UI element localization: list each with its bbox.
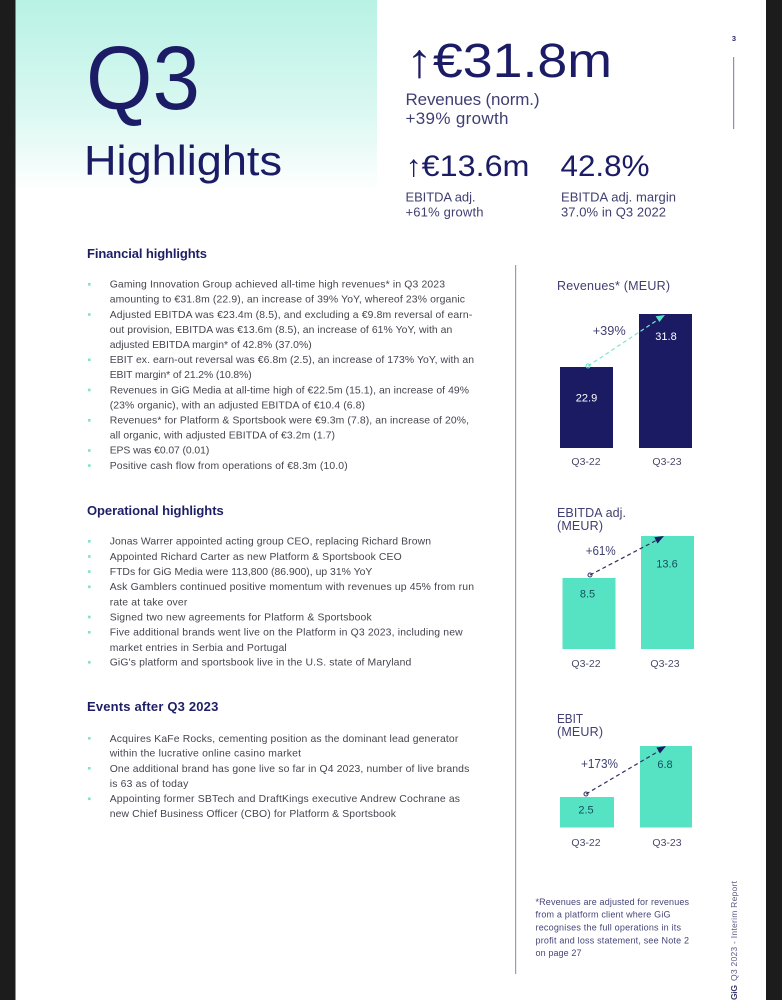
KPI: EBITDA adj. [406,150,530,220]
page number: 3 [732,34,736,43]
heading: events after Q3 2023: Events after Q3 2023 [87,699,218,714]
heading: operational highlights: Operational highlights [87,503,224,518]
chart title: EBIT: EBIT [557,712,583,726]
section: operational highlights [87,503,474,669]
chart: EBIT: Q3-23 [652,837,682,849]
bar: revenues Q3-22 [560,367,613,448]
bullet list: operational: Five additional brands went live on the Platform in Q3 2023, including new [110,628,463,638]
bullet list: events: new Chief Business Officer (CBO) for Platform & Sportsbook [110,809,397,820]
bullet list: financial: adjusted EBITDA margin* of 42.8% (37.0%) [110,340,312,351]
chart title: EBIT: (MEUR) [557,725,603,739]
footnote: *Revenues are adjusted for revenues [536,897,690,907]
bullet list: financial: (23% organic), with an adjusted EBITDA of €10.4 (6.8) [110,400,365,411]
footnote: profit and loss statement, see Note 2 [536,935,689,945]
growth arrow: EBITDA [588,536,664,577]
section: events after Q3 2023 [87,699,469,820]
bar: EBIT Q3-23 [640,746,692,828]
bullet list: financial: Gaming Innovation Group achieved all-time high revenues* in Q3 2023 [110,280,445,291]
KPI: EBITDA adj. margin [560,150,676,220]
bullet list: operational: Ask Gamblers continued positive momentum with revenues up 45% from run [110,582,474,593]
KPI: EBITDA adj.: +61% growth [406,204,484,220]
section: financial highlights [87,246,474,472]
KPI: revenues: ↑€31.8m [406,35,612,88]
chart title: EBITDA adj. [557,506,626,533]
bullet list: financial [88,280,474,472]
chart: revenues: Q3-22 [571,456,601,468]
chart: revenues [557,279,692,468]
chart title: EBIT [557,712,603,739]
KPI: EBITDA adj. margin: 42.8% [560,150,650,183]
bullet list: financial: out provision, EBITDA was €13.6m (8.5), an increase of 61% YoY, with an [110,325,453,336]
title: Q3 Highlights: Highlights [84,137,282,184]
chart: revenues: +39% [593,323,626,338]
chart title: EBITDA adj.: EBITDA adj. [557,506,626,520]
bullet list: financial: EBIT ex. earn-out reversal was €6.8m (2.5), an increase of 173% YoY, with an [110,355,474,366]
footnote: recognises the full operations in its [536,922,682,932]
KPI: EBITDA adj. margin: 37.0% in Q3 2022 [561,204,666,220]
bullet list: events: Acquires KaFe Rocks, cementing position as the dominant lead generator [110,734,459,745]
bullet list: financial: EBIT margin* of 21.2% (10.8%) [110,370,252,381]
chart: EBITDA adj.: 8.5 [580,588,595,600]
bullet list: operational: GiG's platform and sportsbook live in the U.S. state of Maryland [110,658,412,669]
KPI: EBITDA adj. margin: EBITDA adj. margin [561,190,676,204]
bullet list: financial: Revenues* for Platform & Sportsbook were €9.3m (7.8), an increase of 20%, [110,416,469,426]
bullet list: operational [88,537,474,669]
bar: EBITDA Q3-22 [562,578,616,649]
footnote: from a platform client where GiG [536,910,670,920]
bar: revenues Q3-23 [639,314,692,448]
KPI: EBITDA adj.: ↑€13.6m [406,150,530,183]
chart: revenues: 31.8 [655,331,677,343]
chart: revenues: Q3-23 [652,456,682,468]
chart: EBIT: +173% [581,756,618,771]
bullet list: financial: all organic, with adjusted EBITDA of €3.2m (1.7) [110,431,335,442]
bullet list: events: One additional brand has gone live so far in Q4 2023, number of live brands [110,764,469,775]
bar: EBIT Q3-22 [560,797,614,828]
vertical footer label: GiG [729,985,739,1000]
chart: EBIT: Q3-22 [571,837,601,849]
growth arrow: revenues [586,315,665,368]
KPI: revenues: +39% growth [406,109,508,128]
bullet list: financial: Positive cash flow from operations of €8.3m (10.0) [110,461,348,472]
chart: revenues: 22.9 [576,392,597,404]
bullet list: events [88,734,469,820]
bullet list: events: within the lucrative online casino market [109,749,301,760]
vertical footer label: Q3 2023 - Interim Report [729,880,739,981]
bullet list: operational: Jonas Warrer appointed acting group CEO, replacing Richard Brown [110,537,431,548]
bullet list: operational: FTDs for GiG Media were 113,800 (86.900), up 31% YoY [110,567,372,578]
bullet list: operational: Appointed Richard Carter as new Platform & Sportsbook CEO [110,552,402,563]
bullet list: operational: Signed two new agreements for Platform & Sportsbook [110,612,372,623]
heading: financial highlights: Financial highlights [87,246,207,261]
chart: EBITDA adj.: 13.6 [656,558,678,570]
chart: EBITDA adj. [557,506,694,670]
bullet list: financial: amounting to €31.8m (22.9), an increase of 39% YoY, whereof 23% organic [110,295,465,306]
bullet list: events: is 63 as of today [110,779,189,790]
bullet list: operational: rate at take over [110,597,188,608]
bullet list: financial: Adjusted EBITDA was €23.4m (8.5), and excluding a €9.8m reversal of earn- [110,310,472,321]
chart: EBITDA adj.: Q3-23 [650,658,680,670]
chart: EBIT: 6.8 [657,759,673,771]
KPI: revenues: Revenues (norm.) [406,90,540,109]
KPI: EBITDA adj.: EBITDA adj. [406,190,476,204]
bullet list: events: Appointing former SBTech and DraftKings executive Andrew Cochrane as [110,794,460,805]
chart title: EBITDA adj.: (MEUR) [557,519,603,533]
growth arrow: EBIT [584,746,666,796]
title: Q3 Highlights: Q3 [86,29,200,129]
chart title: revenues: Revenues* (MEUR) [557,279,670,293]
chart: EBIT: 2.5 [578,804,594,816]
footnote [536,897,690,958]
bullet list: financial: EPS was €0.07 (0.01) [110,446,209,457]
chart: EBITDA adj.: +61% [586,543,616,558]
footnote: on page 27 [536,948,582,958]
chart: EBIT [557,712,692,849]
title: Q3 Highlights [84,29,282,184]
KPI: revenues [406,35,612,128]
bullet list: operational: market entries in Serbia and Portugal [110,643,287,654]
bar: EBITDA Q3-23 [641,536,694,649]
chart: EBITDA adj.: Q3-22 [571,658,601,670]
bullet list: financial: Revenues in GiG Media at all-time high of €22.5m (15.1), an increase of 49% [110,385,469,396]
